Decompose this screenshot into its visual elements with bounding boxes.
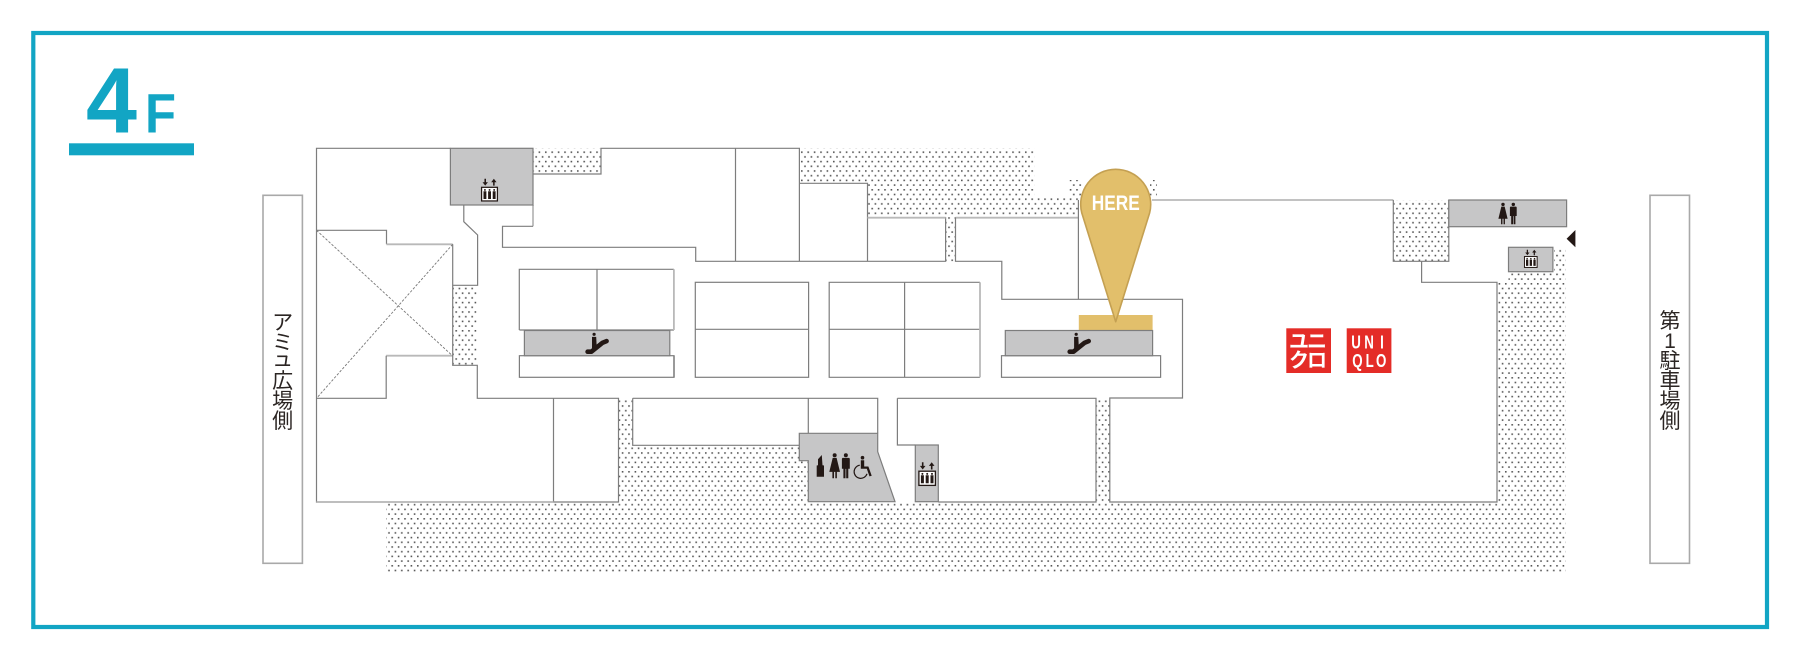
icon: lipstick bbox=[817, 455, 824, 477]
restroom northeast bbox=[1449, 200, 1567, 227]
restroom core south bbox=[799, 433, 895, 502]
side label: parking bbox=[1650, 195, 1690, 563]
icon: wheelchair bbox=[854, 456, 872, 478]
here highlight bar bbox=[1079, 315, 1153, 330]
atrium void cross bbox=[316, 230, 453, 398]
logo: uniqlo katakana: クロ bbox=[1289, 344, 1327, 373]
logo: uniqlo latin: QLO bbox=[1352, 351, 1386, 372]
numeral 4: 4 bbox=[86, 49, 137, 153]
icon: woman bbox=[829, 453, 840, 478]
atrium void outline bbox=[316, 230, 386, 244]
icon: elevator bbox=[482, 179, 497, 201]
elevator core south bbox=[915, 445, 938, 502]
floor label: 4F bbox=[69, 49, 194, 155]
elevator northeast bbox=[1508, 247, 1553, 272]
side label: parking: 第1駐車場側 bbox=[1660, 310, 1680, 433]
here pin bbox=[1081, 169, 1151, 322]
logo: uniqlo latin: UNI bbox=[1351, 332, 1384, 353]
icon: escalator bbox=[1070, 333, 1089, 352]
right shop block bbox=[829, 282, 980, 377]
icon: elevator bbox=[919, 462, 935, 485]
dotted outdoor areas bbox=[386, 148, 1566, 573]
letter F: F bbox=[145, 82, 176, 145]
icon: woman bbox=[1498, 203, 1508, 224]
logo: uniqlo katakana: ユニ bbox=[1289, 325, 1327, 354]
floor plan bbox=[316, 148, 1567, 573]
underline bbox=[69, 143, 194, 155]
logo: uniqlo latin bbox=[1347, 328, 1391, 373]
right escalator block bbox=[1002, 330, 1161, 377]
icon: escalator bbox=[588, 333, 607, 352]
middle shop block bbox=[695, 282, 809, 377]
walls bbox=[316, 148, 1497, 502]
logo: uniqlo katakana bbox=[1286, 325, 1331, 373]
side label: amu plaza bbox=[263, 195, 302, 563]
entrance arrow bbox=[1567, 230, 1575, 247]
icon: man bbox=[842, 453, 850, 478]
icon: elevator bbox=[1524, 250, 1537, 267]
here pin: HERE bbox=[1092, 192, 1140, 215]
icon: man bbox=[1510, 203, 1517, 224]
side label: amu plaza: アミュ広場側 bbox=[272, 312, 293, 433]
left escalator block bbox=[519, 269, 674, 377]
elevator core north bbox=[450, 148, 533, 205]
